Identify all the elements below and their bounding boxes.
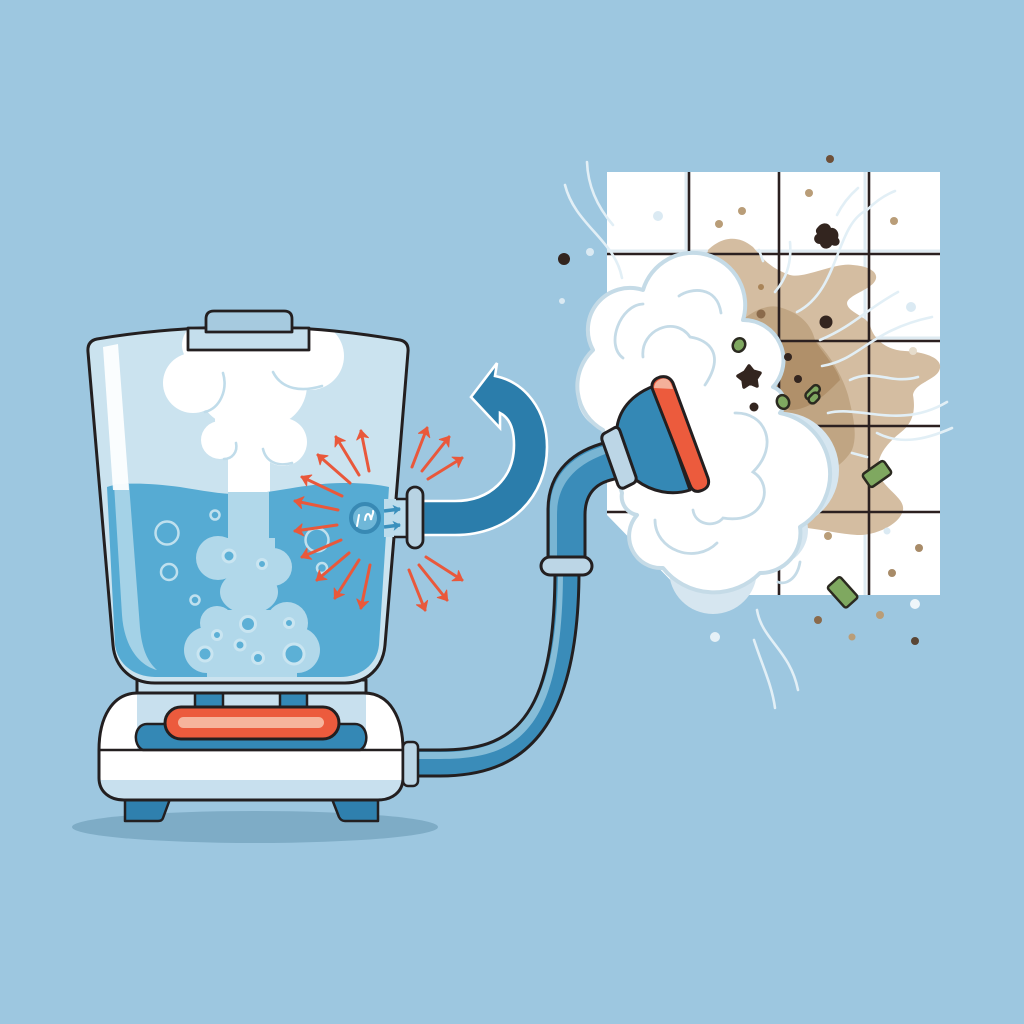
upper hose highlight [550,445,611,560]
cloud curls [615,290,800,583]
water bubbles [156,510,328,604]
white air streaks [565,162,952,708]
blue cradle [136,724,366,750]
base divider [99,749,403,751]
glass highlight [103,344,129,490]
base window [137,693,366,750]
base body [99,693,403,800]
port neck lines [394,499,408,537]
red button [165,707,339,739]
base neck [137,680,366,695]
hose connector [403,742,418,786]
hose collar [541,557,592,575]
blender base [99,680,418,821]
port outflow arrows [384,509,400,527]
nozzle body [617,386,690,493]
base outline [99,693,403,800]
blue flow arrow [423,363,547,535]
stain: light [700,239,940,535]
cloud body [577,253,830,592]
impeller swirl [357,511,373,526]
base studs [195,693,223,708]
debris particles [558,155,923,645]
upper hose [548,442,622,560]
foam bubbles [198,550,304,664]
tan and brown dots [715,155,923,645]
scraper highlight [654,379,673,389]
base feet [125,799,170,821]
steam column and puffs [163,322,344,500]
pressure arrows inside jar [295,431,370,608]
water [107,483,389,677]
stain: medium [740,306,855,475]
submerged column and foam [184,492,320,677]
port flange [407,487,423,548]
impeller port [351,504,379,532]
pressure arrows outside jar [409,428,462,610]
illustration: blender steam cleaner [72,155,954,843]
lower hose [416,570,579,776]
lid [188,328,309,350]
jar outline [88,327,408,683]
outlet port [351,487,423,548]
button highlight [178,717,324,728]
tile edge shading [607,172,940,595]
stain: dark [770,341,840,410]
hose to nozzle [416,442,622,776]
steam curls [205,372,322,464]
lower hose highlight [418,570,563,759]
pale dots [559,211,920,642]
blender shadow [72,811,438,843]
nozzle collar [602,427,636,488]
tile wall [607,172,940,595]
steam cloud at nozzle [577,253,839,614]
base lower band [100,780,402,799]
green bits [730,336,892,608]
grout lines [607,172,940,595]
water highlight band [114,484,157,670]
jar glass [88,327,408,683]
blender jar [88,311,408,683]
nozzle head [602,377,709,493]
cloud shadow [577,359,839,614]
lid handle [206,311,292,332]
port neck [384,499,408,537]
nozzle scraper red [652,377,709,491]
dark clumps [558,223,840,412]
